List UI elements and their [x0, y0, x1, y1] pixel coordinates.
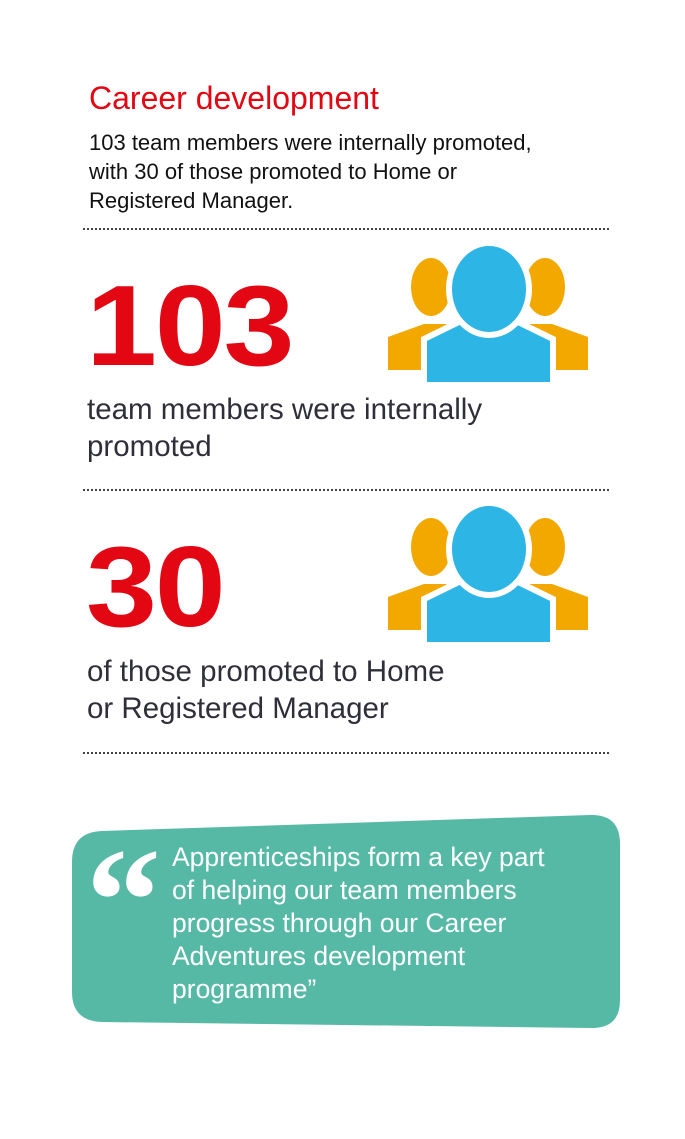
intro text	[89, 130, 532, 213]
quote text: of helping our team members	[172, 875, 517, 905]
quote text: Adventures development	[172, 941, 465, 971]
label 30: or Registered Manager	[87, 692, 389, 725]
label 30: of those promoted to Home	[87, 655, 444, 688]
label 103: team members were internally	[87, 393, 482, 426]
quote mark: “	[86, 818, 161, 984]
label 30	[87, 655, 444, 725]
label 103	[87, 393, 482, 463]
stat: 103: 103	[86, 263, 292, 390]
quote text: Apprenticeships form a key part	[172, 842, 545, 872]
stat: 30: 30	[86, 524, 224, 651]
intro text: with 30 of those promoted to Home or	[89, 159, 457, 184]
icon: people group 1	[388, 246, 588, 382]
title: Career development	[89, 80, 379, 116]
intro text: 103 team members were internally promoted,	[89, 130, 532, 155]
quote callout	[72, 815, 620, 1028]
label 103: promoted	[87, 430, 212, 463]
icon: people group 2	[388, 506, 588, 642]
intro text: Registered Manager.	[89, 188, 293, 213]
quote text	[172, 842, 545, 1004]
quote text: progress through our Career	[172, 908, 506, 938]
quote text: programme”	[172, 974, 316, 1004]
